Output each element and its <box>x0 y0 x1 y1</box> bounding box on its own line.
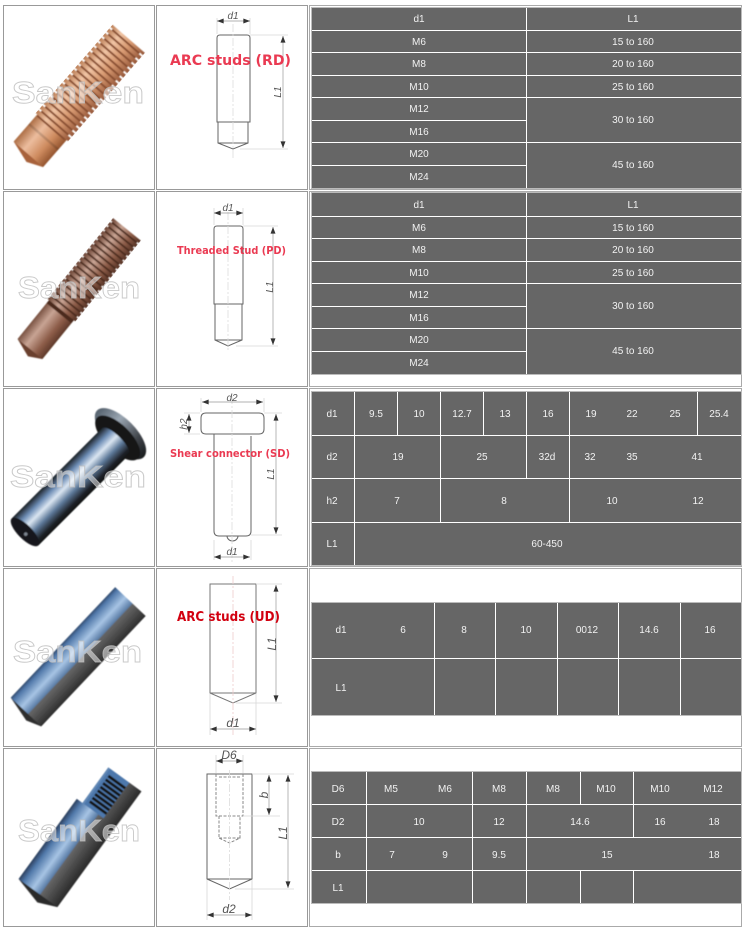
table D6: M6 <box>438 784 452 795</box>
heading: Shear connector (SD): Shear connector (SD) <box>170 448 290 460</box>
table D6: 10 <box>413 817 425 828</box>
table SD: 32 <box>584 452 596 463</box>
diagram D6: b <box>257 791 271 798</box>
table RD: M12 <box>409 104 429 115</box>
watermark SD: SanKen <box>10 459 146 494</box>
watermark UD: SanKen <box>13 634 142 669</box>
table RD: 20 to 160 <box>612 59 654 70</box>
diagram PD: L1 <box>265 281 276 293</box>
table PD: M12 <box>409 290 429 301</box>
table SD: 19 <box>585 409 597 420</box>
table PD: d1 <box>413 200 425 211</box>
table D6: M8 <box>546 784 560 795</box>
table PD: 20 to 160 <box>612 245 654 256</box>
panel: Threaded Stud (PD) <box>4 192 742 386</box>
table D6: 9.5 <box>492 850 506 861</box>
heading: ARC studs (UD): ARC studs (UD) <box>177 610 280 625</box>
table D6: M10 <box>650 784 670 795</box>
table PD: M8 <box>412 245 426 256</box>
diagram RD: d1 <box>227 11 239 22</box>
table D6: 18 <box>708 817 720 828</box>
table RD: d1 <box>413 14 425 25</box>
table D6: D6 <box>332 784 345 795</box>
table RD: 45 to 160 <box>612 160 654 171</box>
table D6: M8 <box>492 784 506 795</box>
diagram D6 <box>207 748 294 920</box>
diagram D6: d2 <box>222 902 236 916</box>
diagram SD: h2 <box>179 418 190 430</box>
icon: copper threaded stud RD <box>9 26 143 172</box>
table RD: M16 <box>409 127 429 138</box>
table SD: 35 <box>626 452 638 463</box>
table SD: 8 <box>501 496 507 507</box>
table D6: 15 <box>601 850 613 861</box>
table UD: 0012 <box>576 625 599 636</box>
diagram RD: L1 <box>273 86 284 98</box>
panel: internal thread stud <box>4 748 742 926</box>
table RD: L1 <box>627 14 639 25</box>
table RD: M8 <box>412 59 426 70</box>
table D6: M10 <box>596 784 616 795</box>
diagram UD: d1 <box>226 716 240 730</box>
table D6: M12 <box>703 784 723 795</box>
table PD: 45 to 160 <box>612 346 654 357</box>
drawing cell PD <box>156 192 308 386</box>
table D6: M5 <box>384 784 398 795</box>
table SD: 9.5 <box>369 409 383 420</box>
table SD: d2 <box>326 452 338 463</box>
diagram UD: L1 <box>265 637 279 651</box>
watermark PD: SanKen <box>18 270 140 305</box>
panel: Shear connector (SD) <box>0 388 742 566</box>
table RD: 25 to 160 <box>612 82 654 93</box>
table PD: M20 <box>409 335 429 346</box>
table D6: L1 <box>332 883 344 894</box>
table RD: M10 <box>409 82 429 93</box>
table PD: L1 <box>627 200 639 211</box>
panel: ARC studs (UD) <box>4 568 742 746</box>
table D6 <box>312 772 742 904</box>
table RD: M20 <box>409 149 429 160</box>
table SD: 13 <box>499 409 511 420</box>
table cell RD <box>310 6 742 190</box>
icon: steel plain stud UD <box>7 587 146 731</box>
table SD: 12 <box>692 496 704 507</box>
table PD <box>312 192 742 374</box>
table SD: h2 <box>326 496 338 507</box>
table D6: 9 <box>442 850 448 861</box>
diagram UD <box>210 576 282 735</box>
table cell PD <box>310 192 742 386</box>
drawing cell UD <box>156 568 308 746</box>
table D6: 7 <box>389 850 395 861</box>
table PD: M6 <box>412 223 426 234</box>
table SD: L1 <box>326 539 338 550</box>
diagram PD <box>214 203 278 350</box>
watermark D6: SanKen <box>18 813 140 848</box>
table UD: 8 <box>461 625 467 636</box>
table SD: 7 <box>394 496 400 507</box>
table D6: 14.6 <box>570 817 590 828</box>
table SD: 10 <box>413 409 425 420</box>
table PD: M24 <box>409 358 429 369</box>
table UD: L1 <box>335 683 347 694</box>
table D6: D2 <box>332 817 345 828</box>
table SD: 22 <box>626 409 638 420</box>
photo cell RD <box>4 6 154 190</box>
table UD: 14.6 <box>639 625 659 636</box>
table SD: 41 <box>691 452 703 463</box>
table UD: d1 <box>335 625 347 636</box>
photo cell PD <box>4 192 154 386</box>
panel: ARC studs (RD) <box>4 6 742 190</box>
table RD: M6 <box>412 37 426 48</box>
table SD: 16 <box>542 409 554 420</box>
table PD: 25 to 160 <box>612 268 654 279</box>
diagram SD <box>179 393 282 562</box>
table UD: 6 <box>400 625 406 636</box>
table D6: 16 <box>654 817 666 828</box>
icon: steel shear connector <box>0 400 154 559</box>
table SD: 60-450 <box>531 539 563 550</box>
diagram D6: L1 <box>276 826 290 840</box>
table SD: 25.4 <box>709 409 729 420</box>
table SD: 32d <box>539 452 555 463</box>
photo cell D6 <box>4 748 154 926</box>
table SD: 19 <box>392 452 404 463</box>
table SD: 25 <box>669 409 681 420</box>
watermark RD: SanKen <box>12 75 144 110</box>
icon: bronze threaded stud PD <box>13 219 139 365</box>
table RD <box>312 8 742 188</box>
photo cell SD <box>4 388 154 566</box>
table UD: 16 <box>704 625 716 636</box>
table RD: 15 to 160 <box>612 37 654 48</box>
icon: steel internally threaded stud <box>14 763 141 914</box>
table D6: 18 <box>708 850 720 861</box>
table cell SD <box>310 388 742 566</box>
drawing cell RD <box>156 6 308 190</box>
diagram RD <box>217 11 288 158</box>
photo cell UD <box>4 568 154 746</box>
table PD: 15 to 160 <box>612 223 654 234</box>
heading: Threaded Stud (PD): Threaded Stud (PD) <box>177 245 286 257</box>
table cell D6 <box>310 748 742 926</box>
table SD: 25 <box>476 452 488 463</box>
table UD <box>312 602 742 716</box>
table cell UD <box>310 568 742 746</box>
diagram SD: L1 <box>266 468 277 480</box>
table PD: M16 <box>409 313 429 324</box>
drawing cell SD <box>156 388 308 566</box>
table RD: 30 to 160 <box>612 115 654 126</box>
table RD: M24 <box>409 172 429 183</box>
heading: ARC studs (RD): ARC studs (RD) <box>170 53 291 69</box>
drawing cell D6 <box>156 748 308 926</box>
diagram D6: D6 <box>221 748 237 762</box>
table D6: b <box>335 850 341 861</box>
table SD: 12.7 <box>452 409 472 420</box>
table D6: 12 <box>493 817 505 828</box>
diagram SD: d1 <box>226 547 238 558</box>
table PD: M10 <box>409 268 429 279</box>
table UD: 10 <box>520 625 532 636</box>
diagram SD: d2 <box>226 393 238 404</box>
table PD: 30 to 160 <box>612 301 654 312</box>
table SD: d1 <box>326 409 338 420</box>
table SD: 10 <box>606 496 618 507</box>
table SD <box>312 392 742 566</box>
diagram PD: d1 <box>222 203 234 214</box>
